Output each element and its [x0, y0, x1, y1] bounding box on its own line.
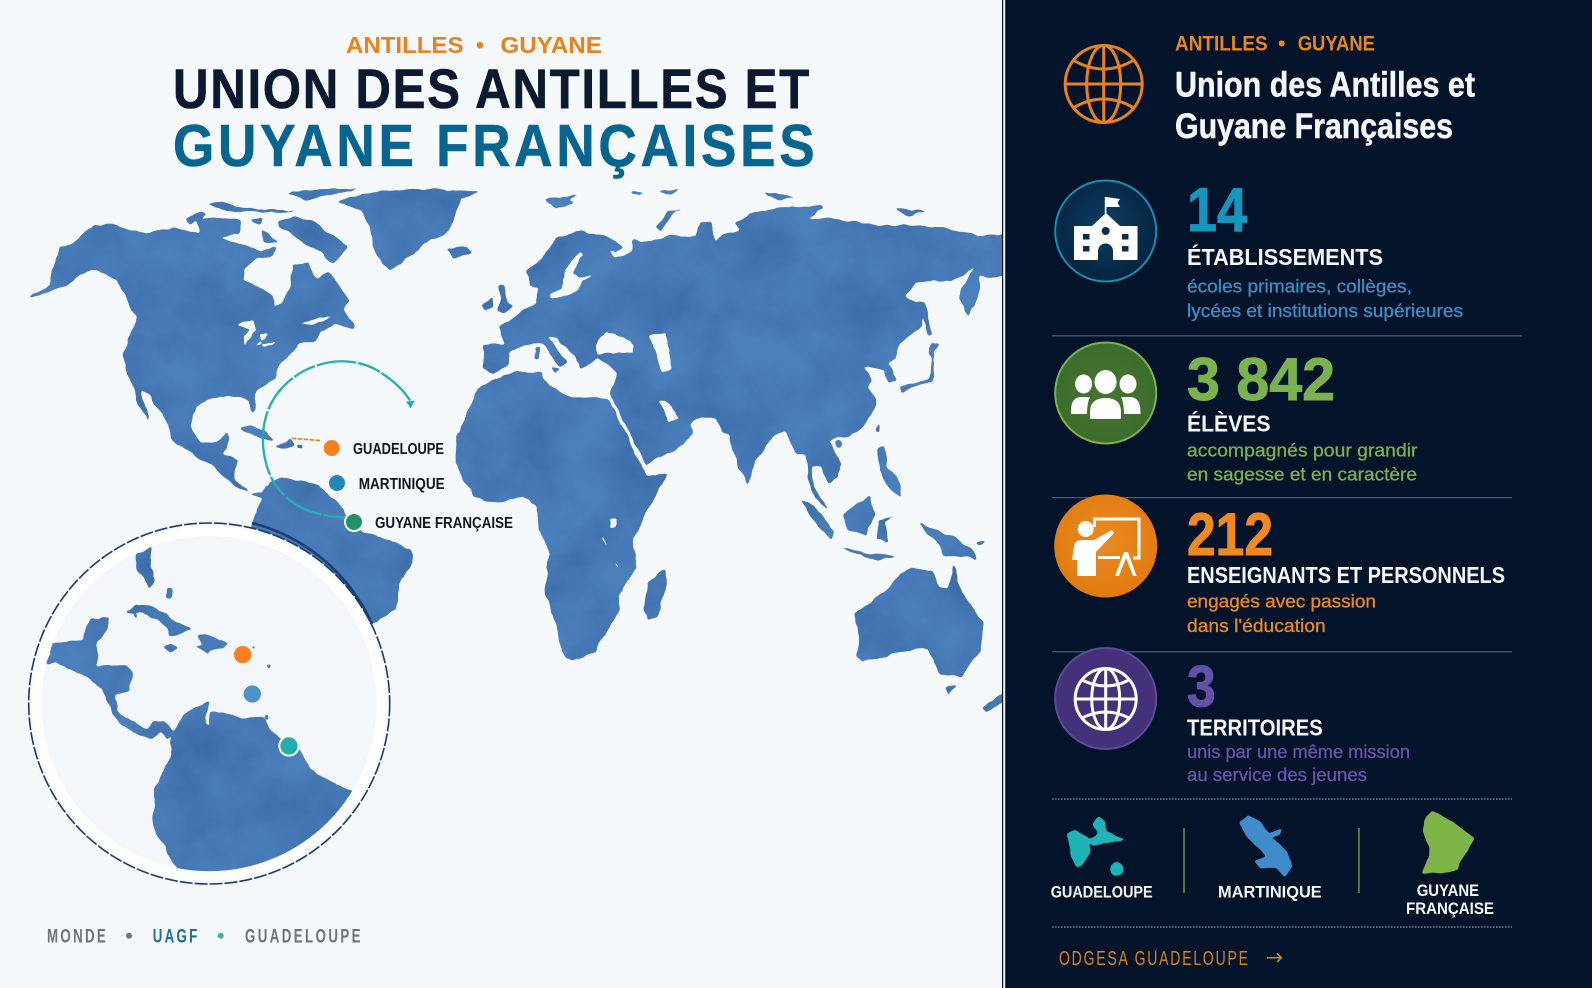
title line 1: UNION DES ANTILLES ET: [173, 58, 809, 121]
inset dot: Guyane: [279, 736, 299, 756]
Martinique silhouette: [1239, 815, 1293, 877]
sidebar header: [1065, 33, 1475, 146]
stat: établissements: lycées et institutions supérieures: [1187, 301, 1463, 321]
eyebrow: GUYANE: [500, 32, 602, 58]
territories row: GUADELOUPE: [1051, 883, 1153, 902]
dashed arc arrow: [263, 361, 415, 517]
Guyane silhouette: [1421, 811, 1475, 874]
territories row: GUYANE: [1417, 881, 1479, 900]
marker: Guyane française: [345, 513, 513, 532]
icon: teacher: [1072, 519, 1139, 576]
stat: enseignants: 212: [1187, 501, 1273, 568]
inset dot: Martinique: [244, 685, 261, 703]
stat: enseignants: ENSEIGNANTS ET PERSONNELS: [1187, 562, 1505, 588]
left map background: [0, 0, 1002, 988]
footer link: ODGESA GUADELOUPE: [1059, 946, 1248, 970]
marker: Martinique: MARTINIQUE: [359, 476, 445, 493]
icon: globe orange: [1065, 46, 1142, 122]
inset arc highlight: [252, 523, 372, 624]
marker: Guadeloupe: [324, 440, 444, 458]
stat: territoires: au service des jeunes: [1187, 765, 1367, 785]
bottom breadcrumb: GUADELOUPE: [245, 926, 361, 947]
territories row: [1051, 811, 1494, 918]
marker: Martinique: [329, 475, 445, 493]
stat: enseignants: engagés avec passion: [1187, 592, 1376, 612]
panel: stats sidebar: [1002, 0, 1592, 988]
stat: établissements: écoles primaires, collèges,: [1187, 277, 1412, 297]
inset zoom circle: [29, 523, 390, 900]
Guadeloupe silhouette: [1067, 815, 1126, 876]
seas and lakes: [128, 252, 679, 573]
stat: enseignants: dans l'éducation: [1187, 616, 1326, 636]
marker: Guyane française: GUYANE FRANÇAISE: [375, 515, 513, 532]
title line 2: GUYANE FRANÇAISES: [173, 112, 815, 179]
stat: élèves: ÉLÈVES: [1187, 410, 1270, 437]
eyebrow: [346, 32, 602, 58]
icon: people: [1071, 370, 1141, 419]
stat: territoires: 3: [1187, 655, 1216, 720]
stat: établissements: [1055, 176, 1463, 321]
eyebrow: ANTILLES: [346, 32, 464, 58]
sidebar header: Union des Antilles et: [1175, 66, 1475, 105]
stat: enseignants: [1054, 494, 1505, 636]
sidebar header: ANTILLES: [1175, 33, 1268, 56]
arrow: [1267, 954, 1282, 962]
stat: établissements: 14: [1187, 176, 1247, 245]
inset dot: Guadeloupe: [234, 646, 251, 663]
Americas: [28, 188, 480, 498]
Eurasia, Africa, Oceania: [455, 190, 1007, 712]
stat: territoires: unis par une même mission: [1187, 742, 1410, 762]
South America: [251, 478, 413, 624]
sidebar header: GUYANE: [1298, 33, 1375, 56]
bottom breadcrumb: [47, 926, 361, 947]
bottom breadcrumb: UAGF: [153, 926, 197, 947]
inset map: [46, 547, 352, 872]
bottom breadcrumb: MONDE: [47, 926, 106, 947]
icon: school: [1074, 197, 1138, 260]
stat: territoires: TERRITOIRES: [1187, 715, 1323, 741]
eyebrow: •: [476, 32, 484, 58]
stat: élèves: 3 842: [1187, 346, 1335, 413]
sidebar header: •: [1278, 33, 1285, 56]
territories row: MARTINIQUE: [1218, 883, 1322, 902]
stat: élèves: [1055, 342, 1418, 485]
sidebar header: Guyane Françaises: [1175, 107, 1453, 146]
icon: globe white: [1075, 668, 1136, 730]
marker: Guadeloupe: GUADELOUPE: [353, 441, 444, 458]
stat: territoires: [1055, 648, 1410, 785]
stat: élèves: en sagesse et en caractère: [1187, 465, 1417, 485]
stat: élèves: accompagnés pour grandir: [1187, 441, 1418, 461]
territories row: FRANÇAISE: [1406, 899, 1494, 918]
world map: [28, 188, 1007, 712]
title block: [173, 32, 815, 179]
map arc and territory markers: [263, 361, 513, 532]
stat: établissements: ÉTABLISSEMENTS: [1187, 243, 1383, 270]
